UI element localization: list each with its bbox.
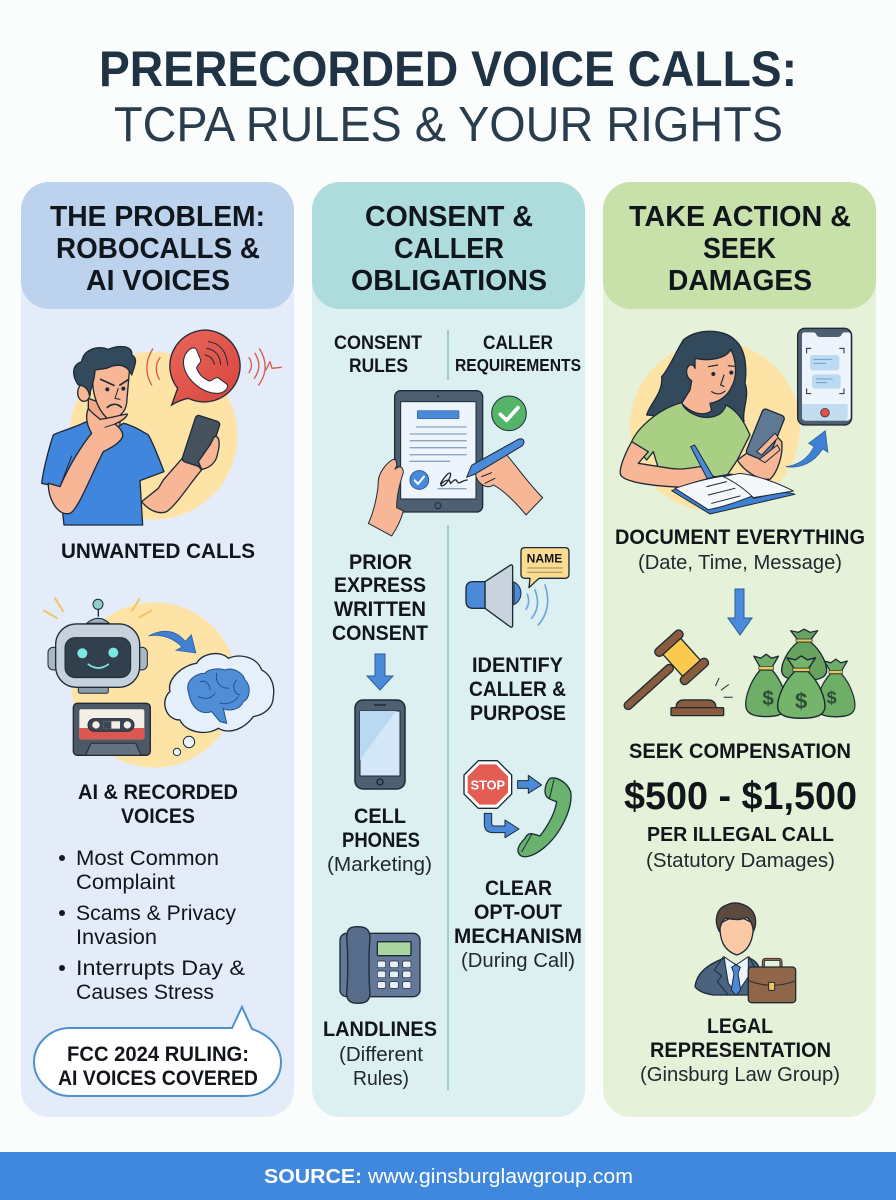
subheading: consent rules: RULES <box>349 356 408 377</box>
icon: stop sign, arrows and green handset: STOP <box>471 778 505 793</box>
icon: lawyer with briefcase <box>695 903 796 1003</box>
man's phone <box>181 415 221 469</box>
label: identify caller and purpose: PURPOSE <box>470 702 566 725</box>
subheading: consent rules <box>334 333 422 377</box>
label: prior express written consent: PRIOR <box>349 551 412 574</box>
pen <box>467 439 524 477</box>
left hand holding tablet <box>368 459 403 536</box>
title <box>99 41 797 152</box>
label: per illegal call: PER ILLEGAL CALL <box>647 824 834 846</box>
man's arm and hand on chin <box>48 408 127 514</box>
panel header: consent: OBLIGATIONS <box>351 265 547 297</box>
panel header: take action <box>603 182 876 309</box>
panel header: take action: SEEK <box>703 233 776 265</box>
label: identify caller and purpose: CALLER & <box>469 678 566 701</box>
bullet list: Scams & Privacy <box>76 902 237 925</box>
label: clear opt-out mechanism: OPT-OUT <box>474 901 562 924</box>
woman's hair <box>647 331 747 422</box>
man's fingers <box>198 436 219 469</box>
label: document everything <box>615 526 865 574</box>
panel header: the problem: AI VOICES <box>86 265 230 297</box>
label: prior express written consent <box>332 551 428 645</box>
label: legal representation: LEGAL <box>707 1015 773 1038</box>
panel header: take action: DAMAGES <box>668 265 812 297</box>
label: unwanted calls: UNWANTED CALLS <box>61 540 255 563</box>
arrow: consent to cell phones <box>367 654 393 690</box>
icon: money bags: $ <box>762 687 774 710</box>
woman's green top <box>632 403 750 478</box>
icon: red phone speech bubble <box>147 330 281 405</box>
arrow: robot to brain <box>149 631 196 653</box>
panel header: consent <box>312 182 585 309</box>
subheading: caller requirements: CALLER <box>483 333 553 354</box>
panel: consent and caller obligations <box>312 182 585 1117</box>
bullet list <box>59 847 245 1004</box>
label: AI and recorded voices <box>78 781 238 828</box>
label: per illegal call <box>646 824 835 872</box>
illustration: woman documenting calls <box>620 328 852 514</box>
label: landlines (different rules): Rules) <box>353 1067 409 1090</box>
label: AI and recorded voices: AI & RECORDED <box>78 781 238 804</box>
label: clear opt-out mechanism: CLEAR <box>485 877 552 900</box>
woman's phone <box>745 408 785 462</box>
footer: source <box>0 1152 896 1200</box>
icon: phone recording <box>798 328 852 425</box>
icon: landline telephone <box>340 927 420 1003</box>
label: legal representation: (Ginsburg Law Group) <box>640 1063 840 1086</box>
label: document everything: DOCUMENT EVERYTHING <box>615 526 865 549</box>
label: legal representation: REPRESENTATION <box>650 1039 831 1062</box>
label: clear opt-out mechanism: (During Call) <box>461 949 575 972</box>
label: legal representation <box>640 1015 840 1086</box>
bullet list: Interrupts Day & <box>76 957 245 980</box>
callout: FCC 2024 ruling: AI VOICES COVERED <box>58 1067 258 1090</box>
man's hair <box>74 347 136 395</box>
pen <box>691 445 718 488</box>
illustration: frustrated man with phone <box>42 330 281 525</box>
man's other arm <box>142 453 202 513</box>
open notebook <box>672 474 795 514</box>
icon: stop sign, arrows and green handset <box>464 761 571 857</box>
icon: green check <box>492 396 526 431</box>
arrow: curved to phone <box>786 431 828 467</box>
icon: cell phone <box>355 700 405 789</box>
label: seek compensation: SEEK COMPENSATION <box>629 740 851 763</box>
panel: take action and seek damages <box>603 182 876 1117</box>
icon: gavel <box>610 628 732 725</box>
label: landlines (different rules) <box>323 1018 437 1090</box>
bullet list: Complaint <box>76 871 175 894</box>
footer: source: SOURCE: www.ginsburglawgroup.com <box>264 1166 633 1188</box>
man's face <box>92 360 130 419</box>
man's shirt <box>42 422 164 525</box>
label: identify caller and purpose: IDENTIFY <box>472 654 563 677</box>
label: prior express written consent: CONSENT <box>332 622 428 645</box>
label: clear opt-out mechanism: MECHANISM <box>454 925 582 948</box>
icon: speaker with name bubble: NAME <box>527 551 562 565</box>
statistic: damages amount: $500 - $1,500 <box>624 775 857 818</box>
woman's face <box>682 349 736 414</box>
title: PRERECORDED VOICE CALLS: <box>99 41 797 97</box>
bullet list: Invasion <box>76 926 157 949</box>
label: prior express written consent: EXPRESS <box>334 574 426 597</box>
panel header: the problem <box>21 182 294 309</box>
callout: FCC 2024 ruling: FCC 2024 RULING: <box>67 1043 249 1066</box>
panel header: the problem: THE PROBLEM: <box>50 201 265 233</box>
label: landlines (different rules): (Different <box>339 1043 423 1066</box>
panel header: consent: CALLER <box>394 233 504 265</box>
label: identify caller and purpose <box>469 654 566 725</box>
icon: robot <box>48 599 147 693</box>
subheading: consent rules: CONSENT <box>334 333 422 354</box>
subheading: caller requirements: REQUIREMENTS <box>455 355 581 375</box>
label: per illegal call: (Statutory Damages) <box>646 849 835 872</box>
label: cell phones (marketing): (Marketing) <box>327 853 432 876</box>
label: cell phones (marketing) <box>327 805 432 876</box>
man's neck <box>88 398 120 427</box>
woman's arms <box>620 442 715 488</box>
label: prior express written consent: WRITTEN <box>334 598 426 621</box>
bullet list: Most Common <box>76 847 219 870</box>
icon: speaker with name bubble <box>466 548 569 627</box>
panel header: consent: CONSENT & <box>365 201 533 233</box>
illustration: robot, cassette and brain <box>44 598 274 768</box>
icon: cassette tape <box>73 703 150 755</box>
panel: the problem <box>21 182 294 1117</box>
label: clear opt-out mechanism <box>454 877 582 972</box>
icon: money bags <box>746 629 855 718</box>
title: TCPA RULES & YOUR RIGHTS <box>114 98 783 152</box>
label: cell phones (marketing): CELL <box>354 805 406 828</box>
callout: FCC 2024 ruling <box>34 1007 281 1096</box>
icon: money bags: $ <box>827 687 837 707</box>
panel header: the problem: ROBOCALLS & <box>56 233 260 265</box>
label: document everything: (Date, Time, Message) <box>638 551 842 574</box>
label: AI and recorded voices: VOICES <box>121 805 195 828</box>
subheading: caller requirements <box>455 333 581 375</box>
arrow: document to compensation <box>728 589 752 635</box>
illustration: tablet being signed <box>368 391 543 536</box>
label: cell phones (marketing): PHONES <box>342 829 420 852</box>
icon: thought bubble with brain <box>165 654 274 756</box>
panel header: take action: TAKE ACTION & <box>629 201 851 233</box>
icon: money bags: $ <box>795 688 807 713</box>
right hand <box>475 452 543 515</box>
label: landlines (different rules): LANDLINES <box>323 1018 437 1041</box>
bullet list: Causes Stress <box>76 981 214 1004</box>
